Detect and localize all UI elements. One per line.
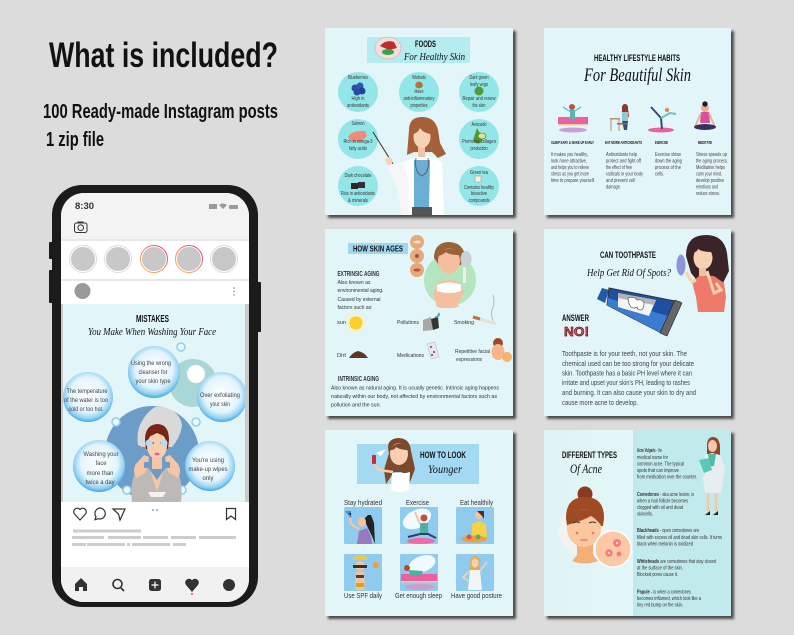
tile: eat healthily bbox=[456, 498, 494, 544]
factor: smoking bbox=[454, 295, 496, 326]
food: salmon: Salmon bbox=[352, 121, 365, 127]
subtitle: contents list bbox=[43, 101, 278, 151]
tile: use spf daily: Use SPF daily bbox=[344, 591, 382, 600]
food: walnuts bbox=[399, 72, 439, 112]
post action icons bbox=[74, 508, 236, 520]
illustration: doctor with clipboard bbox=[699, 437, 725, 515]
text: antioxidants: and prevent cell bbox=[606, 178, 635, 184]
bubble: make-up wipes bbox=[185, 441, 235, 491]
text: acne vulgaris: Acne Vulgaris - the bbox=[637, 448, 662, 454]
background circles bbox=[105, 359, 217, 500]
food: walnuts: Walnuts bbox=[412, 75, 426, 81]
text: meditate: Meditation helps bbox=[696, 165, 725, 171]
text: meditate: Stress speeds up bbox=[696, 152, 727, 158]
foods header: FOODS bbox=[415, 39, 436, 49]
text: meditate: develop positive bbox=[696, 178, 724, 184]
bubble: make-up wipes: You're using bbox=[192, 457, 224, 464]
panel: can toothpaste bbox=[544, 229, 731, 416]
food: leafy vegs: leafy vegs bbox=[470, 82, 488, 88]
food: salmon bbox=[338, 119, 378, 159]
lifestyle heading: HEALTHY LIFESTYLE HABITS bbox=[594, 53, 680, 63]
factor: medications bbox=[397, 342, 439, 359]
younger header band bbox=[357, 444, 479, 484]
tile: use spf daily bbox=[344, 554, 382, 600]
foods header: For Healthy Skin bbox=[403, 51, 465, 63]
factor: repetitive facial expressions: Repetitive facial bbox=[455, 349, 490, 355]
text: comedones: clogged with oil and dead bbox=[637, 505, 683, 511]
text: whiteheads bbox=[637, 559, 716, 578]
text: meditate: the aging process. bbox=[696, 158, 728, 164]
icon: meditating woman bbox=[694, 101, 716, 130]
habit headings: MEDITATE bbox=[698, 140, 712, 145]
icon: woman eating at table bbox=[610, 104, 629, 131]
skin ages heading bbox=[348, 243, 408, 254]
bubble: washing too often: more than bbox=[86, 470, 114, 477]
habit headings: EAT MORE ANTIOXIDANTS bbox=[605, 140, 642, 145]
text: antioxidants: protect and fight off bbox=[606, 158, 641, 164]
bubble: make-up wipes: only bbox=[202, 475, 214, 482]
bubble: over exfoliating bbox=[197, 372, 247, 422]
text: whiteheads: Blocked pores cause it. bbox=[637, 572, 678, 578]
text: antioxidants bbox=[606, 152, 643, 190]
phone screen bbox=[61, 193, 249, 602]
text: meditate bbox=[696, 152, 728, 197]
food: leafy vegs: the skin bbox=[472, 103, 486, 109]
food: salmon: fatty acids bbox=[349, 146, 367, 152]
toothpaste paragraph: Toothpaste is for your teeth, not your skin. The bbox=[562, 351, 687, 358]
factor: pollutions: Pollutions bbox=[397, 320, 419, 326]
text: exercise: down the aging bbox=[655, 158, 682, 164]
bubble: over exfoliating: Over exfoliating bbox=[200, 392, 240, 399]
text: antioxidants: radicals in your body bbox=[606, 172, 643, 178]
caption placeholder bars bbox=[72, 530, 236, 546]
post heading: You Make When Washing Your Face bbox=[88, 326, 216, 338]
tile: have good posture: Have good posture bbox=[451, 591, 502, 600]
food: avocado: production bbox=[470, 146, 488, 152]
text: exercise: process of the bbox=[655, 165, 681, 171]
bottom navigation bar bbox=[61, 567, 249, 602]
toothpaste heading: Help Get Rid Of Spots? bbox=[586, 267, 671, 279]
factor: smoking: Smoking bbox=[454, 320, 474, 326]
illustration: toothpaste tube bbox=[597, 288, 682, 336]
carousel dots bbox=[152, 509, 158, 511]
food: leafy vegs: Dark green bbox=[470, 75, 489, 81]
food: dark chocolate: & minerals bbox=[348, 198, 368, 204]
food: green tea: Contains healthy bbox=[464, 185, 494, 191]
text: whiteheads: Whiteheads are comedones that stay closed bbox=[637, 559, 716, 565]
younger header band: HOW TO LOOK bbox=[420, 450, 466, 461]
food: blueberries: antioxidants bbox=[347, 103, 369, 109]
answer: no: NO! bbox=[564, 324, 589, 339]
text: blackheads bbox=[637, 528, 722, 548]
tile: have good posture bbox=[451, 554, 502, 600]
text: antioxidants: the effect of free bbox=[606, 165, 632, 171]
text: whiteheads: at the surface of the skin. bbox=[637, 566, 683, 572]
habit headings bbox=[551, 140, 712, 145]
illustration: woman with mirror bbox=[676, 235, 729, 312]
illustration: woman with mirror bbox=[410, 235, 476, 308]
factor: pollutions bbox=[397, 312, 440, 331]
text: acne vulgaris: from medication over the counter. bbox=[637, 474, 697, 480]
food: avocado: Avocado bbox=[472, 122, 487, 128]
toothpaste paragraph: skin. Toothpaste has a basic PH level where it can bbox=[562, 370, 692, 378]
bubble: water temperature bbox=[63, 372, 113, 422]
intrinsic aging text: Also known as natural aging. It is usually genetic. Intrinsic aging happens bbox=[331, 386, 499, 392]
phone side buttons bbox=[49, 242, 261, 332]
phone mockup bbox=[49, 185, 261, 607]
toothpaste heading: CAN TOOTHPASTE bbox=[600, 250, 656, 260]
post heading bbox=[88, 314, 216, 338]
text: comedones: when a hair follicle becomes bbox=[637, 498, 688, 504]
toothpaste paragraph: irritate and upset your skin's PH, leading to rashes bbox=[562, 380, 690, 387]
illustration: face with acne bbox=[559, 486, 632, 568]
extrinsic aging text: Also known as bbox=[338, 280, 371, 286]
toothpaste paragraph bbox=[562, 351, 696, 407]
intrinsic aging text: pollution and the sun. bbox=[331, 402, 381, 408]
post: mistakes bbox=[61, 304, 249, 502]
text: papule bbox=[637, 590, 701, 608]
toothpaste paragraph: and burning. It can also cause your skin to dry and bbox=[562, 390, 696, 397]
title: What is included? bbox=[49, 36, 278, 75]
habit headings: SLEEP EARY & WAKE UP EARLY bbox=[551, 140, 594, 145]
food: blueberries: Blueberries bbox=[348, 75, 368, 81]
text: meditate: emotions and bbox=[696, 184, 718, 190]
food: avocado: Promotes collagen bbox=[462, 139, 496, 145]
text: sleep: and helps you to relieve bbox=[551, 165, 589, 171]
bubble: wrong cleanser: Using the wrong bbox=[131, 360, 171, 367]
panel: healthy lifestyle habits bbox=[544, 28, 731, 215]
food: dark chocolate: Dark chocolate bbox=[344, 173, 372, 179]
text: blackheads: black when melanin is oxidized bbox=[637, 542, 693, 548]
panel: foods for healthy skin bbox=[325, 28, 513, 215]
toothpaste paragraph: chemical used can be too strong for your delicate bbox=[562, 361, 694, 368]
intrinsic aging text: naturally within our body, not affected by environmental factors such as bbox=[331, 394, 497, 400]
acne heading: Of Acne bbox=[570, 461, 602, 476]
extrinsic aging text: factors such as: bbox=[338, 305, 372, 311]
lifestyle heading bbox=[583, 53, 691, 86]
toothpaste heading bbox=[586, 250, 671, 279]
text: meditate: reduce stress. bbox=[696, 191, 720, 197]
status bar and camera header bbox=[61, 193, 249, 239]
factor: repetitive facial expressions: expressions bbox=[456, 357, 482, 363]
skin ages heading: HOW SKIN AGES bbox=[353, 244, 404, 254]
extrinsic aging text: EXTRINSIC AGING bbox=[338, 271, 380, 278]
text: papule: becomes inflamed, which look like a bbox=[637, 596, 701, 602]
text: comedones: Comedones - aka acne lesion, is bbox=[637, 492, 694, 498]
habit headings: EXERCISE bbox=[655, 140, 668, 145]
text: sleep: look more attractive, bbox=[551, 158, 587, 164]
food: leafy vegs bbox=[459, 72, 499, 112]
tile: exercise bbox=[400, 498, 438, 544]
bubble: make-up wipes: make-up wipes bbox=[188, 466, 228, 473]
phone body bbox=[52, 185, 258, 607]
subtitle: contents list: 1 zip file bbox=[46, 129, 104, 151]
tile: stay hydrated: Stay hydrated bbox=[344, 498, 382, 507]
text: blackheads: filled with excess oil and dead skin cells. It turns bbox=[637, 535, 722, 541]
bubble: water temperature: The temperature bbox=[66, 388, 108, 395]
bubble: washing too often: Washing your bbox=[84, 451, 119, 458]
small bubbles bbox=[112, 343, 200, 494]
tile: exercise: Exercise bbox=[406, 498, 429, 507]
foods header bbox=[367, 37, 470, 63]
food: green tea: bioactive bbox=[471, 191, 487, 197]
tile: eat healthily: Eat healthily bbox=[460, 498, 493, 507]
food: blueberries bbox=[338, 72, 378, 112]
text: blackheads: Blackheads - open comedones are bbox=[637, 528, 699, 534]
food: blueberries: High in bbox=[352, 96, 365, 102]
food: walnuts: Have bbox=[414, 89, 424, 95]
text: sleep bbox=[551, 152, 595, 184]
bubble: wrong cleanser: cleanser for bbox=[138, 369, 168, 376]
stories row bbox=[70, 246, 238, 272]
text: acne vulgaris: common acne. The typical bbox=[637, 462, 684, 468]
food: green tea: compounds bbox=[468, 198, 490, 204]
food: walnuts: properties bbox=[410, 103, 428, 109]
illustration: woman with spray bbox=[372, 438, 415, 492]
text: acne vulgaris bbox=[637, 448, 697, 480]
intrinsic aging text bbox=[331, 376, 499, 408]
food: avocado bbox=[459, 119, 499, 159]
food: dark chocolate bbox=[338, 166, 378, 206]
answer label: ANSWER bbox=[562, 313, 589, 323]
text: comedones bbox=[637, 492, 694, 518]
food: leafy vegs: Repair and renew bbox=[462, 96, 496, 102]
acne heading: DIFFERENT TYPES bbox=[562, 450, 617, 461]
lifestyle heading: For Beautiful Skin bbox=[583, 65, 691, 86]
panel: different types of acne bbox=[544, 430, 731, 616]
icon: yoga dancer bbox=[648, 107, 676, 132]
tile: get enough sleep bbox=[395, 552, 442, 600]
bubble: washing too often: face bbox=[96, 460, 107, 467]
text: papule: Papule - is when a comedones bbox=[637, 590, 691, 596]
food: walnuts: anti-inflammatory bbox=[404, 96, 435, 102]
factor: sun: sun bbox=[337, 320, 346, 326]
separators bbox=[61, 239, 249, 281]
text: comedones: skincells. bbox=[637, 512, 653, 518]
younger header band: Younger bbox=[428, 462, 462, 476]
food: green tea bbox=[459, 166, 499, 206]
food: salmon: Rich in omega-3 bbox=[344, 139, 373, 145]
woman with towel bbox=[132, 407, 182, 502]
bubble: wrong cleanser bbox=[128, 346, 180, 398]
icon: woman waking in bed bbox=[558, 104, 588, 132]
post heading: MISTAKES bbox=[136, 314, 169, 325]
text: sleep: time to prepare yourself. bbox=[551, 178, 595, 184]
post header avatar and menu bbox=[74, 283, 235, 299]
bubble: over exfoliating: your skin bbox=[210, 401, 230, 408]
acne heading bbox=[562, 450, 617, 476]
text: antioxidants: Antioxidants help bbox=[606, 152, 637, 158]
bubble: water temperature: of the water is too bbox=[64, 397, 108, 404]
doctor with pointer bbox=[373, 117, 446, 215]
tile: stay hydrated bbox=[344, 498, 382, 544]
bubble: water temperature: cold or too hot. bbox=[68, 406, 104, 413]
text: papule: tiny red bump on the skin. bbox=[637, 602, 683, 608]
text: acne vulgaris: spots that can improve bbox=[637, 468, 679, 474]
text: antioxidants: damage. bbox=[606, 184, 621, 190]
factor: dirt bbox=[337, 351, 368, 359]
text: sleep: stress as you get more bbox=[551, 172, 589, 178]
text: exercise: cells. bbox=[655, 172, 664, 178]
factor: sun bbox=[337, 314, 364, 332]
toothpaste paragraph: cause more acne to develop. bbox=[562, 400, 638, 407]
extrinsic aging text: environmental aging. bbox=[338, 288, 384, 294]
panel: how skin ages bbox=[325, 229, 513, 416]
text: exercise bbox=[655, 152, 682, 178]
food: green tea: Green tea bbox=[470, 170, 488, 176]
food: dark chocolate: Rice in antioxidants bbox=[341, 191, 375, 197]
text: acne vulgaris: medical name for bbox=[637, 455, 668, 461]
text: exercise: Exercise slows bbox=[655, 152, 681, 158]
status bar and camera header: 8:30 bbox=[75, 201, 94, 212]
factor: dirt: Dirt bbox=[337, 353, 347, 359]
extrinsic aging text: Caused by external bbox=[338, 297, 380, 303]
extrinsic aging text bbox=[338, 271, 384, 311]
factor: medications: Medications bbox=[397, 353, 424, 359]
text: sleep: It makes you healthy, bbox=[551, 152, 588, 158]
right column background bbox=[633, 430, 731, 616]
panel: how to look younger bbox=[325, 430, 513, 616]
bubble: washing too often bbox=[73, 440, 125, 492]
tile: get enough sleep: Get enough sleep bbox=[395, 591, 442, 600]
intrinsic aging text: INTRINSIC AGING bbox=[338, 376, 379, 383]
subtitle: contents list: 100 Ready-made Instagram posts bbox=[43, 101, 278, 123]
factor: repetitive facial expressions bbox=[455, 338, 512, 363]
text: meditate: calm your mind, bbox=[696, 172, 722, 178]
bubble: wrong cleanser: your skin type bbox=[136, 378, 171, 385]
bubble: washing too often: twice a day bbox=[86, 479, 115, 486]
